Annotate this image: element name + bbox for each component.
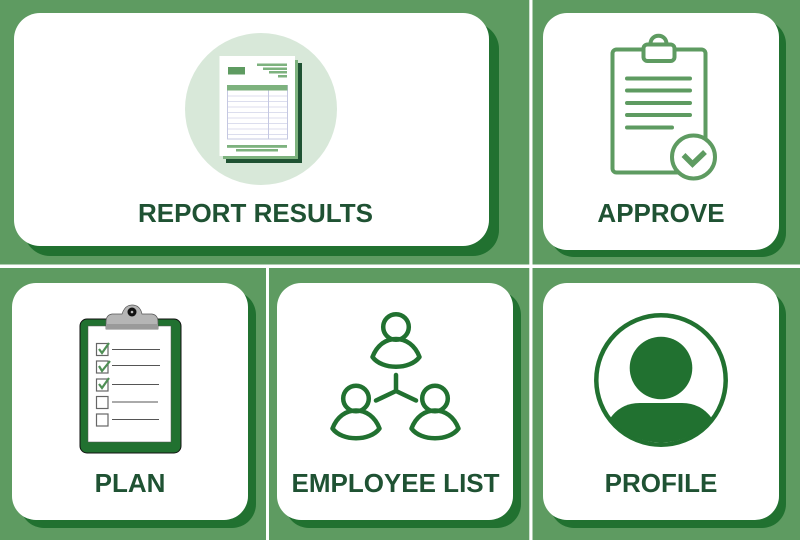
icon: clipboard with check badge — [612, 36, 715, 178]
heading: approve: APPROVE — [597, 198, 725, 228]
icon: stacked report document — [185, 33, 337, 185]
icon: checklist clipboard — [80, 305, 181, 453]
panel: approve — [543, 13, 786, 257]
heading: employee list: EMPLOYEE LIST — [291, 468, 500, 498]
panel: profile — [543, 283, 786, 528]
heading: plan: PLAN — [95, 468, 165, 498]
icon: three connected people — [332, 314, 458, 438]
panel: plan — [12, 283, 256, 528]
panel: report results — [14, 13, 499, 256]
panel: employee list — [277, 283, 521, 528]
heading: profile: PROFILE — [605, 468, 717, 498]
icon: profile avatar — [596, 315, 726, 445]
heading: report results: REPORT RESULTS — [138, 198, 373, 228]
